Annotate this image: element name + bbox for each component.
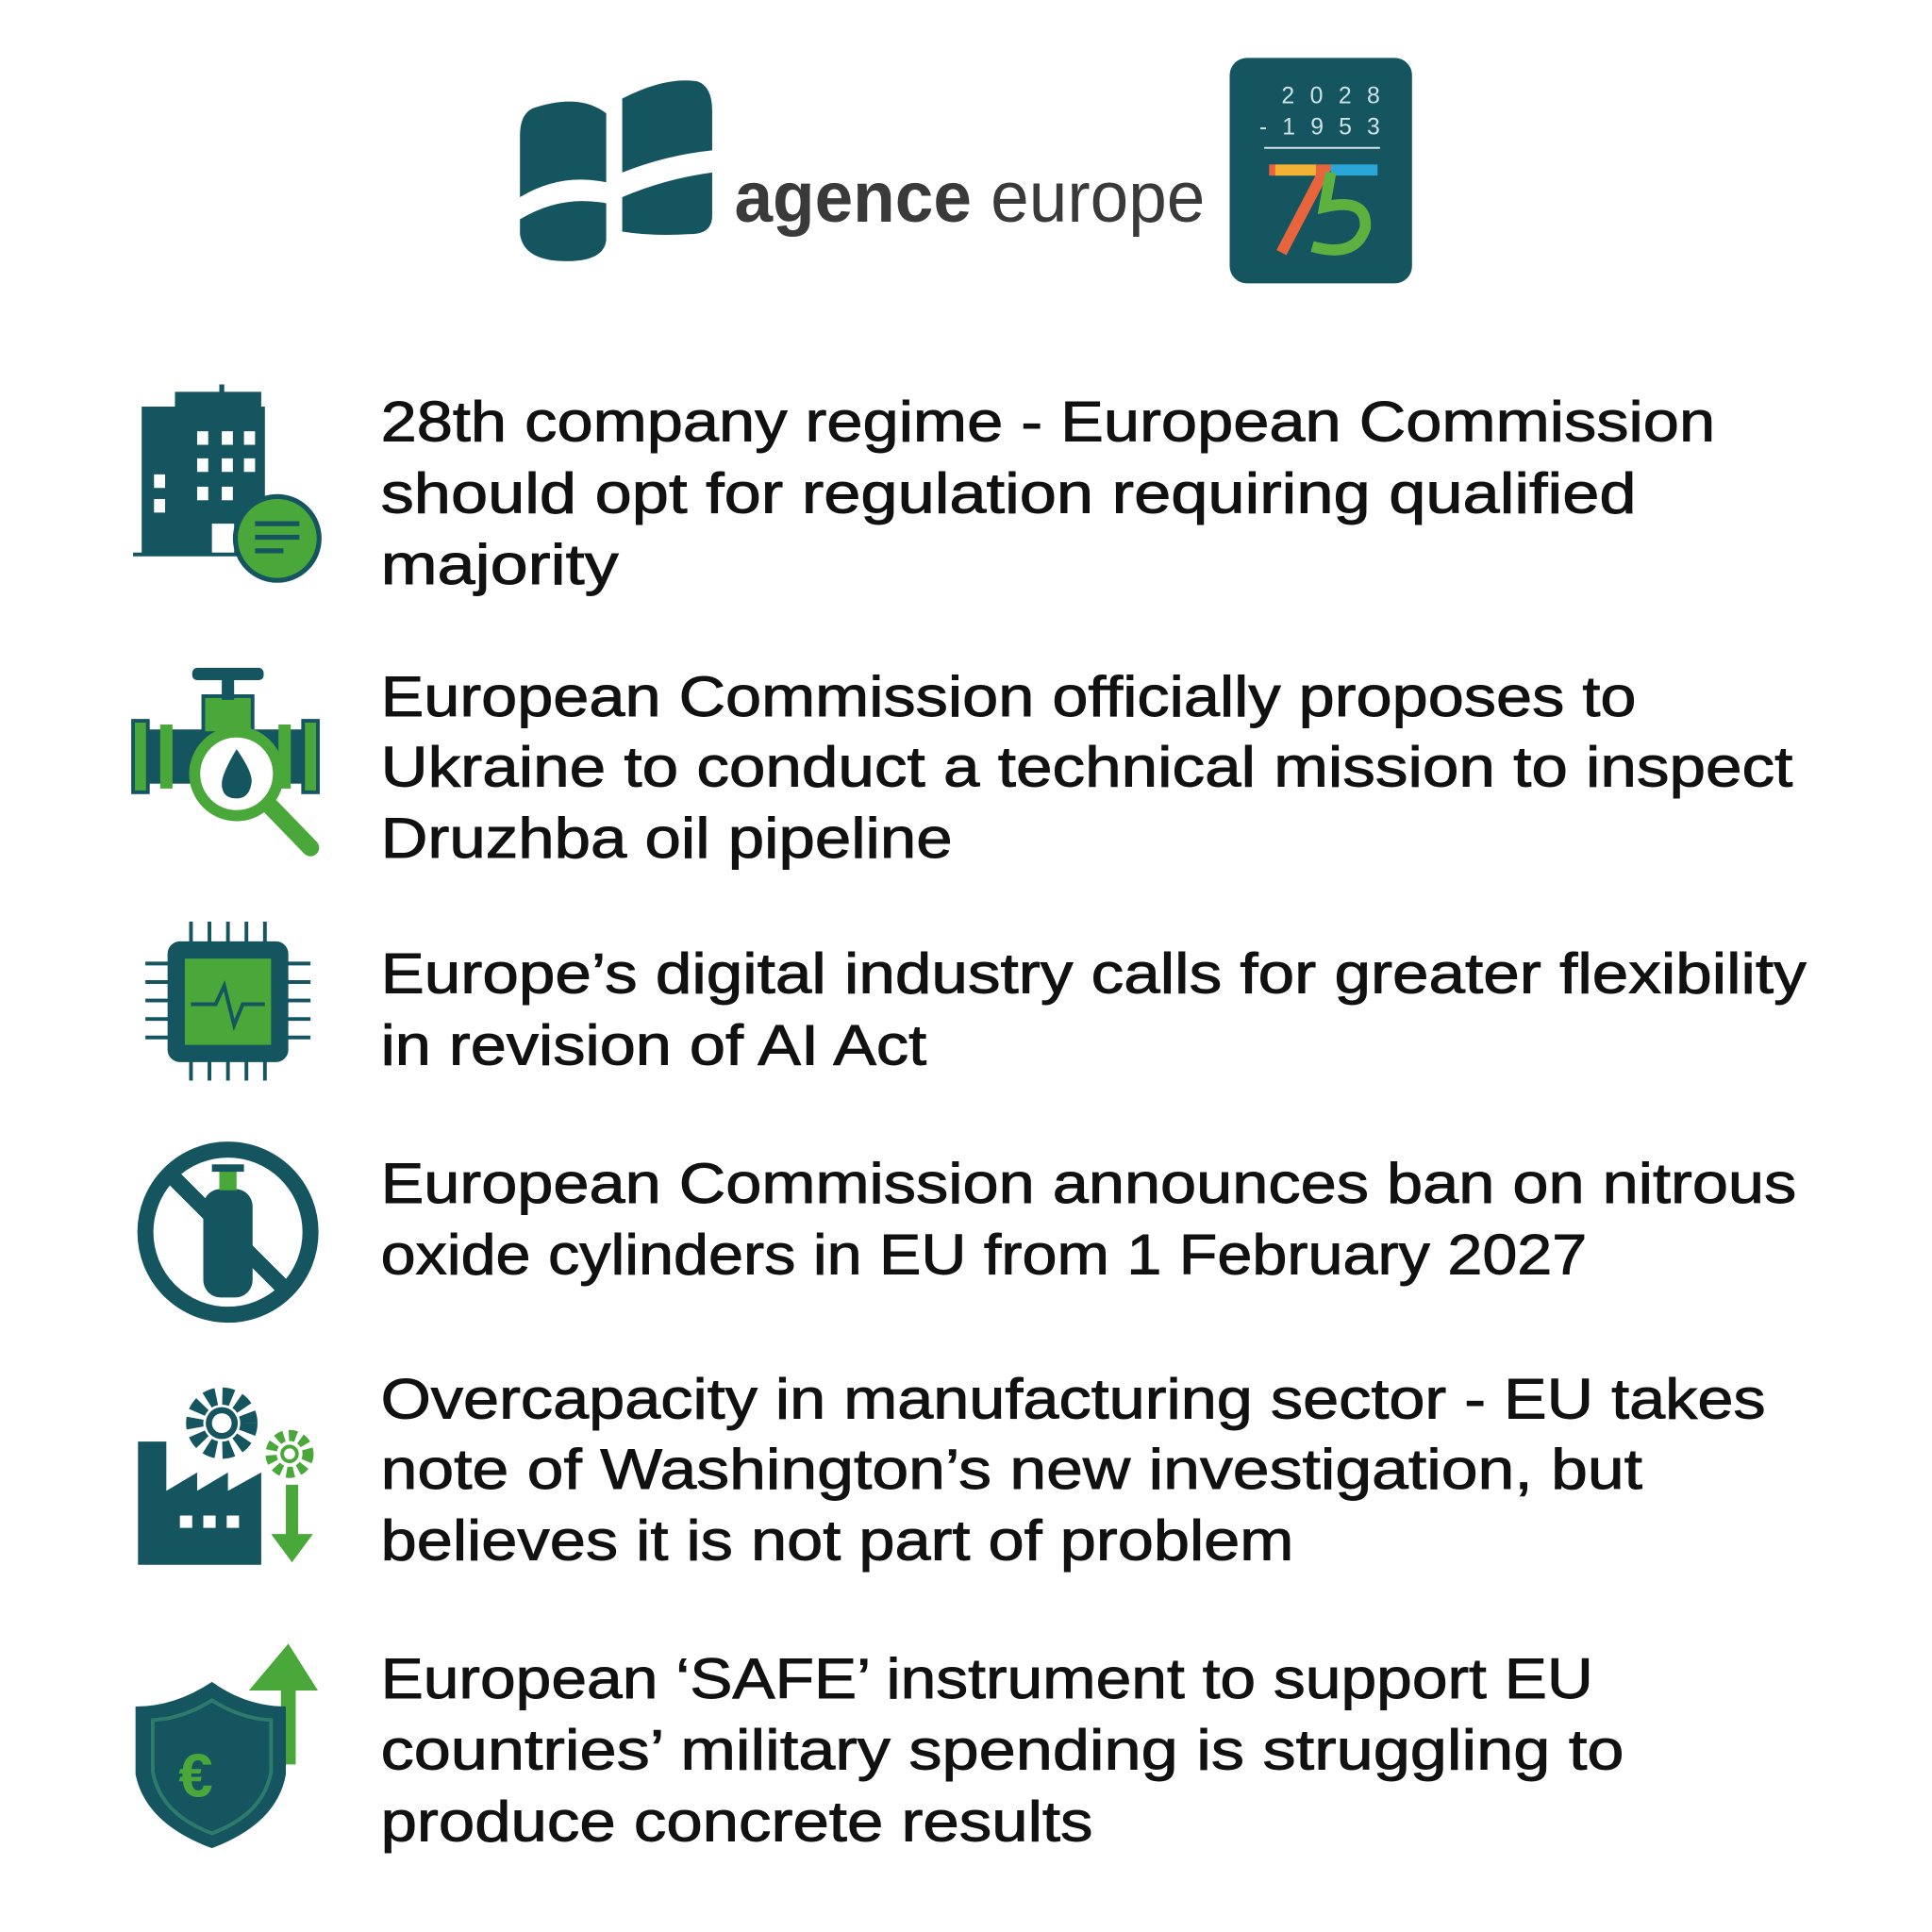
badge: 75 years	[1230, 58, 1412, 283]
text: headline 3: in revision of AI Act	[381, 1013, 927, 1076]
icon: building with document	[133, 385, 319, 580]
icon: factory with gears and down arrow	[138, 1396, 313, 1565]
text: headline 1: majority	[381, 533, 619, 596]
row 5	[138, 1367, 1766, 1573]
icon: shield with euro and up arrow: €	[178, 1740, 213, 1809]
text: headline 3	[381, 942, 1807, 1076]
text: headline 6	[381, 1647, 1624, 1853]
text: headline 4: European Commission announces ban on nitrous	[381, 1152, 1796, 1215]
logo text: agence europe	[734, 158, 1205, 238]
text: headline 5	[381, 1367, 1766, 1573]
logo mark	[520, 80, 712, 261]
icon: AI chip	[145, 922, 310, 1080]
badge: 75 years: -1953	[1259, 114, 1380, 140]
row 2	[133, 665, 1793, 870]
icon: pipeline with magnifier	[133, 668, 318, 848]
text: headline 4: oxide cylinders in EU from 1 February 2027	[381, 1224, 1587, 1287]
text: headline 2: Ukraine to conduct a technical mission to inspect	[381, 735, 1793, 798]
text: headline 3: Europe’s digital industry calls for greater flexibility	[381, 942, 1807, 1006]
icon: banned nitrous cylinder	[145, 1150, 310, 1315]
text: headline 2: European Commission officially proposes to	[381, 665, 1637, 728]
row 4	[145, 1150, 1796, 1315]
text: headline 2	[381, 665, 1793, 870]
text: headline 6: countries’ military spending is struggling to	[381, 1719, 1624, 1782]
text: headline 5: Overcapacity in manufacturing sector - EU takes	[381, 1367, 1766, 1430]
text: headline 6: European ‘SAFE’ instrument to support EU	[381, 1647, 1593, 1710]
row 3	[145, 922, 1807, 1080]
row 1	[133, 385, 1715, 596]
text: headline 1: 28th company regime - European Commission	[381, 391, 1715, 454]
text: headline 1: should opt for regulation requiring qualified	[381, 461, 1637, 525]
row 6	[136, 1643, 1624, 1853]
text: headline 4	[381, 1152, 1796, 1287]
text: headline 5: believes it is not part of problem	[381, 1509, 1293, 1573]
text: headline 1	[381, 391, 1715, 596]
text: headline 2: Druzhba oil pipeline	[381, 807, 953, 870]
badge: 75 years: 2028	[1281, 84, 1380, 109]
text: headline 6: produce concrete results	[381, 1790, 1093, 1853]
text: headline 5: note of Washington’s new investigation, but	[381, 1438, 1642, 1501]
logo: agence europe	[520, 80, 1205, 261]
icon: shield with euro and up arrow	[136, 1643, 318, 1848]
